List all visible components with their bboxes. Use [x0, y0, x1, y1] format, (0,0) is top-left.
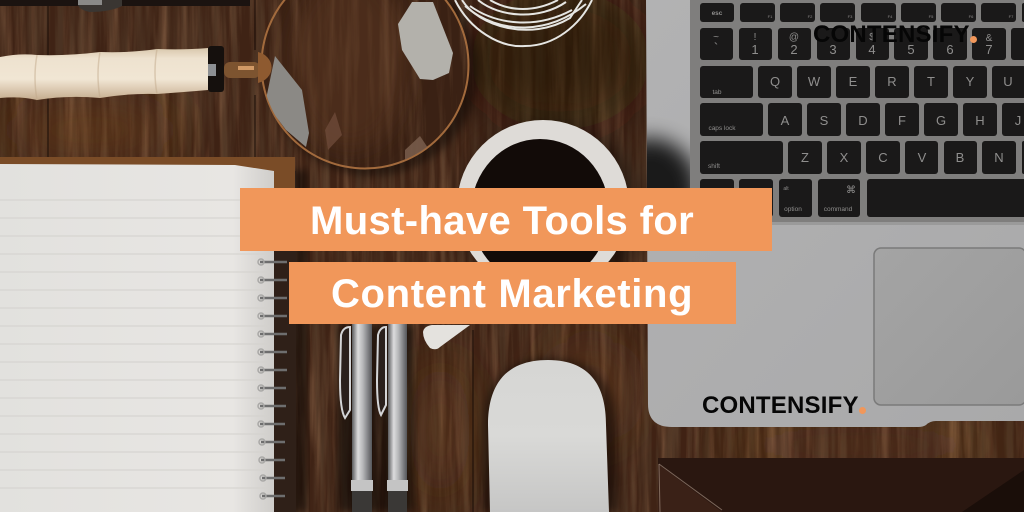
key labels: D [858, 113, 868, 128]
key labels: Z [801, 150, 809, 165]
key labels: 6 [946, 42, 954, 57]
coffee cup [423, 120, 644, 349]
key labels: tab [712, 89, 722, 96]
key labels: ` [714, 40, 718, 55]
leather case [658, 458, 1024, 512]
key labels: Y [966, 74, 975, 89]
key labels: W [808, 74, 821, 89]
key labels: R [887, 74, 897, 89]
key labels: E [849, 74, 858, 89]
key labels: ! [754, 32, 756, 43]
key labels: F3 [848, 14, 853, 19]
title banner line 1 [240, 188, 772, 251]
key labels: G [936, 113, 946, 128]
key labels: 4 [868, 42, 876, 57]
key labels: F4 [888, 14, 893, 19]
title banner line 2: Content Marketing [331, 272, 693, 316]
seal handle [0, 46, 260, 100]
key labels: C [878, 150, 888, 165]
key labels: F5 [929, 14, 934, 19]
key labels: F6 [969, 14, 974, 19]
key labels: V [918, 150, 927, 165]
key labels: T [927, 74, 935, 89]
key labels: 2 [790, 42, 798, 57]
key labels: 7 [985, 42, 993, 57]
key labels: F7 [1009, 14, 1014, 19]
laptop [646, 0, 1024, 427]
key labels: 5 [907, 42, 915, 57]
key labels: @ [789, 32, 799, 43]
keyboard keys [700, 3, 1024, 217]
key labels: $ [869, 32, 875, 43]
key labels: ⌘ [846, 185, 856, 196]
logo: bottom: CONTENSIFY [702, 392, 859, 419]
key labels: 1 [751, 42, 759, 57]
earphone cable coil [455, 0, 592, 46]
key labels: caps lock [708, 125, 736, 132]
key labels: F1 [768, 14, 773, 19]
key labels: 3 [829, 42, 837, 57]
key labels [708, 10, 1021, 213]
title banner line 2 [289, 262, 736, 324]
key labels: H [975, 113, 985, 128]
key labels: U [1003, 74, 1013, 89]
logo: top: CONTENSIFY [813, 21, 970, 48]
key labels: shift [708, 163, 720, 170]
key labels: alt [783, 186, 789, 192]
key labels: S [820, 113, 829, 128]
key labels: ~ [713, 32, 719, 43]
key labels: Q [770, 74, 780, 89]
key labels: N [994, 150, 1004, 165]
trackpad [874, 248, 1024, 405]
title banner line 1: Must-have Tools for [310, 199, 694, 243]
metal object at top edge [78, 0, 122, 12]
key labels: F2 [808, 14, 813, 19]
key labels: F [898, 113, 906, 128]
key labels: B [956, 150, 964, 165]
key labels: command [824, 206, 853, 213]
key labels: A [781, 113, 790, 128]
key labels: option [784, 206, 802, 213]
notebook spiral binding [258, 259, 287, 499]
key labels: X [840, 150, 849, 165]
key labels: esc [712, 10, 723, 17]
computer mouse [482, 358, 618, 512]
key labels: J [1015, 113, 1021, 128]
key labels: & [986, 33, 993, 44]
pens [338, 324, 414, 512]
notebook [0, 157, 308, 512]
magnifying glass [255, 0, 478, 176]
